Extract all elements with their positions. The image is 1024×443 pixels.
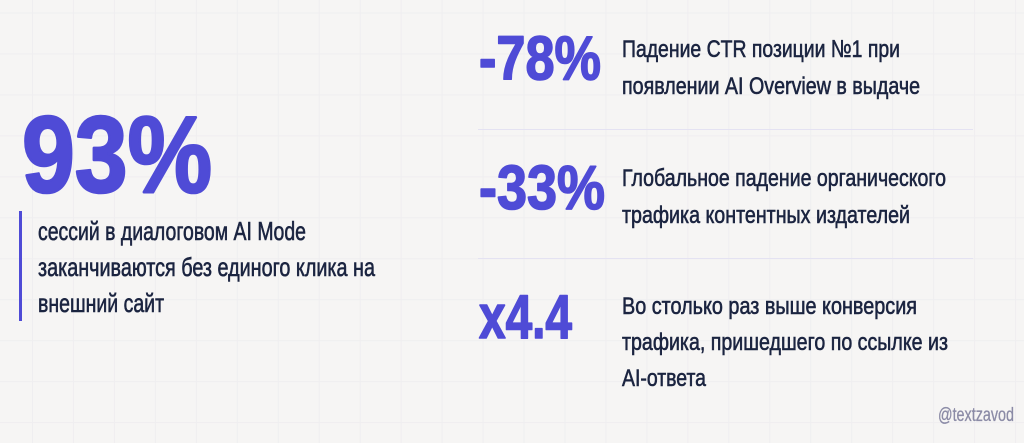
number x4.4: x4.4: [479, 283, 572, 352]
accent bar: [19, 211, 22, 321]
stat row: -33%: [479, 154, 946, 229]
main description: заканчиваются без единого клика на: [38, 252, 375, 282]
number -33%: -33%: [479, 154, 605, 223]
main description: [38, 216, 375, 318]
description -33%: [622, 165, 946, 229]
description -78%: Падение CTR позиции №1 при: [622, 36, 900, 63]
panel: main statistic: [19, 94, 375, 321]
main description: внешний сайт: [38, 288, 164, 318]
description -78%: [622, 36, 920, 100]
description -33%: Глобальное падение органического: [622, 165, 946, 192]
description x4.4: Во столько раз выше конверсия: [622, 293, 917, 320]
description x4.4: трафика, пришедшего по ссылке из: [622, 329, 948, 356]
description -33%: трафика контентных издателей: [622, 202, 910, 229]
description x4.4: [622, 293, 948, 392]
stat row: x4.4: [479, 283, 948, 392]
stat row: -78%: [479, 24, 920, 100]
main description: сессий в диалоговом AI Mode: [38, 216, 306, 246]
number -78%: -78%: [479, 24, 601, 94]
description -78%: появлении AI Overview в выдаче: [622, 73, 920, 100]
description x4.4: AI-ответа: [622, 365, 706, 392]
main number 93%: 93%: [22, 94, 212, 216]
